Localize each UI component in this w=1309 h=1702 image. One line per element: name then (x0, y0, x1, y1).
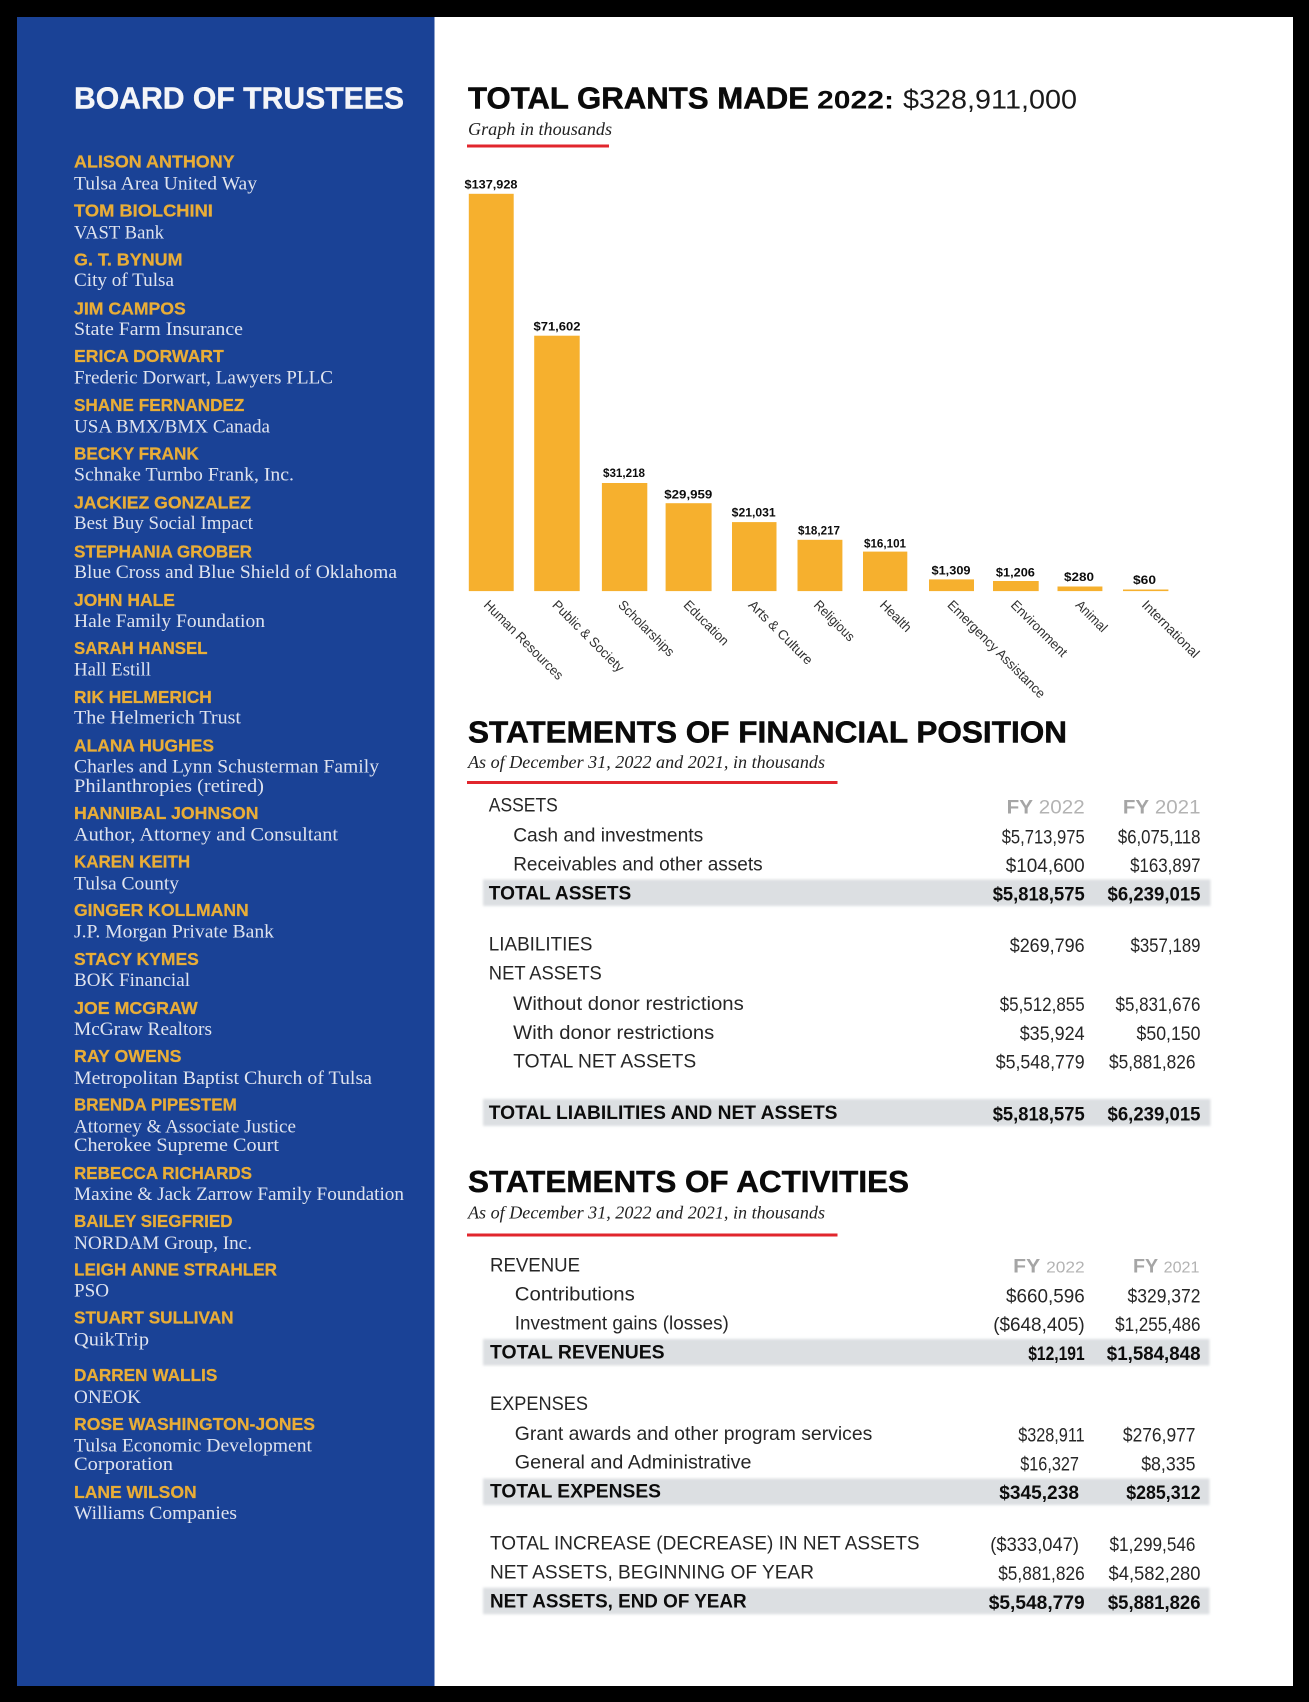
row: net assets header: NET ASSETS (489, 962, 602, 984)
trustee: Joe McGraw: JOE MCGRAW (74, 998, 198, 1018)
table: financial position (483, 795, 1210, 1126)
row: liabilities: $269,796 (1010, 935, 1085, 957)
trustee: G. T. Bynum: City of Tulsa (74, 270, 175, 291)
trustee: G. T. Bynum: G. T. BYNUM (74, 249, 182, 269)
trustee: Joe McGraw: McGraw Realtors (74, 1019, 212, 1040)
white page background (434, 17, 1293, 1686)
trustee: John Hale: Hale Family Foundation (74, 611, 266, 632)
trustee: Darren Wallis: ONEOK (74, 1387, 141, 1408)
row: with donor restrictions: With donor restrictions (513, 1022, 714, 1044)
bar value labels: $280 (1064, 570, 1094, 584)
row: net assets end: $5,548,779 (989, 1592, 1085, 1614)
row: grant awards: $276,977 (1123, 1424, 1196, 1446)
trustee: Karen Keith (74, 851, 190, 894)
trustee: John Hale: JOHN HALE (74, 590, 175, 610)
category axis labels (481, 597, 1203, 701)
row: total assets: TOTAL ASSETS (489, 882, 631, 904)
row: contributions: Contributions (515, 1284, 635, 1306)
row: assets header: FY 2021 (1123, 796, 1200, 818)
row: with donor restrictions (513, 1022, 1201, 1045)
bar value labels: $1,206 (996, 565, 1035, 579)
trustee: Hannibal Johnson (74, 803, 339, 846)
category axis labels: Scholarships (615, 597, 678, 660)
row: without donor restrictions: $5,512,855 (1000, 994, 1085, 1016)
row: contributions: $660,596 (1006, 1285, 1085, 1307)
bar value labels: $137,928 (464, 177, 518, 191)
bar value labels: $16,101 (864, 536, 906, 550)
trustee: Leigh Anne Strahler: LEIGH ANNE STRAHLER (74, 1259, 277, 1279)
row: total assets: $5,818,575 (993, 884, 1085, 906)
trustee: Alana Hughes: Charles and Lynn Schusterman Family (74, 756, 380, 777)
trustee: Karen Keith: KAREN KEITH (74, 851, 190, 871)
row: total liabilities and net assets: TOTAL LIABILITIES AND NET ASSETS (489, 1102, 838, 1124)
row: net assets beginning: NET ASSETS, BEGINNING OF YEAR (490, 1562, 814, 1584)
category axis labels: Human Resources (481, 597, 567, 683)
row: investment gains: $1,255,486 (1115, 1314, 1200, 1336)
row: grant awards: Grant awards and other program services (515, 1423, 873, 1445)
row: liabilities: LIABILITIES (489, 934, 592, 956)
trustee: Leigh Anne Strahler (74, 1259, 277, 1302)
trustee: Stuart Sullivan: STUART SULLIVAN (74, 1308, 234, 1328)
heading: total grants made: 2022: (817, 86, 894, 114)
row: general and administrative: General and Administrative (515, 1452, 752, 1474)
category axis labels: Environment (1008, 597, 1071, 660)
bar value labels: $60 (1133, 573, 1156, 587)
trustee: Stephania Grober: Blue Cross and Blue Shield of Oklahoma (74, 562, 398, 583)
row: total assets: $6,239,015 (1108, 884, 1201, 906)
row: total expenses (490, 1480, 1201, 1504)
subheading: financial position date note: As of December 31, 2022 and 2021, in thousands (467, 752, 825, 772)
trustee: Shane Fernandez (74, 395, 271, 438)
subheading: activities date note: As of December 31, 2022 and 2021, in thousands (467, 1203, 825, 1223)
trustee: Sarah Hansel (74, 638, 208, 681)
table: activities (483, 1254, 1210, 1614)
row: assets header: FY 2022 (1007, 796, 1085, 818)
row: net assets end: $5,881,826 (1108, 1592, 1201, 1614)
trustee: Stacy Kymes: STACY KYMES (74, 949, 199, 969)
trustee: Tom Biolchini: TOM BIOLCHINI (74, 201, 213, 221)
trustee: Lane Wilson: LANE WILSON (74, 1482, 197, 1502)
row: liabilities: $357,189 (1130, 935, 1200, 957)
bar value labels: $29,959 (664, 488, 713, 502)
trustee: Darren Wallis: DARREN WALLIS (74, 1365, 217, 1385)
trustee: Rebecca Richards: REBECCA RICHARDS (74, 1163, 252, 1183)
trustee: Alison Anthony (74, 152, 258, 194)
trustee: Rose Washington-Jones (74, 1414, 315, 1475)
row: without donor restrictions (513, 993, 1200, 1016)
row: investment gains: Investment gains (losses) (515, 1313, 729, 1335)
trustee: Ray Owens: Metropolitan Baptist Church of Tulsa (74, 1068, 373, 1089)
panel: board of trustees (17, 17, 434, 1686)
row: total liabilities and net assets: $5,818,575 (993, 1104, 1085, 1126)
trustee: Brenda Pipestem: Cherokee Supreme Court (74, 1135, 280, 1156)
row: total assets (489, 882, 1201, 906)
trustee: Alana Hughes: ALANA HUGHES (74, 736, 214, 756)
row: total revenues (490, 1342, 1201, 1365)
trustee: Rik Helmerich: RIK HELMERICH (74, 687, 212, 707)
trustee: Brenda Pipestem: Attorney & Associate Justice (74, 1117, 296, 1138)
row: revenue header: FY 2021 (1133, 1256, 1200, 1278)
row: total expenses: TOTAL EXPENSES (490, 1480, 661, 1502)
trustee: Rebecca Richards (74, 1163, 405, 1205)
category axis labels: Animal (1073, 597, 1110, 635)
category axis labels: International (1139, 597, 1203, 661)
trustee: Rose Washington-Jones: Tulsa Economic Development (74, 1436, 313, 1457)
trustee: Jim Campos (74, 298, 243, 340)
trustee: Brenda Pipestem: BRENDA PIPESTEM (74, 1094, 237, 1114)
trustee: Becky Frank: Schnake Turnbo Frank, Inc. (74, 464, 294, 485)
trustee: Ray Owens: RAY OWENS (74, 1046, 182, 1066)
bar value labels: $1,309 (932, 563, 971, 577)
row: net assets beginning: $4,582,280 (1108, 1563, 1201, 1585)
trustee: Stuart Sullivan: QuikTrip (74, 1329, 149, 1350)
category axis labels: Arts & Culture (745, 597, 816, 668)
trustee: Lane Wilson: Williams Companies (74, 1503, 237, 1524)
trustee: Bailey Siegfried: BAILEY SIEGFRIED (74, 1211, 232, 1231)
row: with donor restrictions: $50,150 (1136, 1023, 1201, 1045)
trustee: Rik Helmerich: The Helmerich Trust (74, 707, 242, 728)
trustee: Rose Washington-Jones: Corporation (74, 1454, 174, 1475)
heading: total grants made (468, 80, 1077, 115)
category axis labels: Religious (811, 597, 858, 644)
trustee: Ginger Kollmann: J.P. Morgan Private Bank (74, 921, 275, 942)
trustee: Tom Biolchini: VAST Bank (74, 222, 164, 243)
row: without donor restrictions: Without donor restrictions (513, 993, 744, 1015)
bar chart: grants by category (464, 177, 1203, 701)
trustee: John Hale (74, 590, 266, 632)
heading: statements of activities: STATEMENTS OF ACTIVITIES (468, 1164, 909, 1199)
trustee: Jim Campos: JIM CAMPOS (74, 298, 186, 318)
row: revenue header (490, 1254, 1200, 1278)
row: revenue header: FY 2022 (1013, 1256, 1085, 1278)
trustee: Becky Frank (74, 444, 294, 485)
row: total liabilities and net assets: $6,239,015 (1108, 1104, 1201, 1126)
heading: statements of financial position: STATEMENTS OF FINANCIAL POSITION (468, 715, 1067, 750)
row: total net assets: TOTAL NET ASSETS (513, 1050, 696, 1072)
trustee: Stephania Grober (74, 541, 398, 583)
trustee: Alana Hughes (74, 736, 380, 797)
row: cash and investments: $5,713,975 (1002, 826, 1085, 848)
row: receivables: Receivables and other assets (513, 854, 763, 876)
trustee: Stuart Sullivan (74, 1308, 234, 1350)
trustee: Jim Campos: State Farm Insurance (74, 319, 243, 340)
row: revenue header: REVENUE (490, 1254, 580, 1276)
heading: board of trustees: BOARD OF TRUSTEES (74, 80, 404, 115)
trustee: Stacy Kymes: BOK Financial (74, 970, 190, 991)
row: assets header (489, 795, 1200, 818)
row: grant awards: $328,911 (1018, 1424, 1085, 1446)
trustee: Karen Keith: Tulsa County (74, 874, 180, 894)
row: net assets end: NET ASSETS, END OF YEAR (490, 1591, 747, 1613)
trustee: Ginger Kollmann: GINGER KOLLMANN (74, 900, 249, 920)
subheading: financial position date note (467, 752, 838, 784)
row: expenses header: EXPENSES (490, 1393, 588, 1415)
bar value labels: $21,031 (732, 506, 776, 520)
row: cash and investments: Cash and investments (513, 825, 703, 847)
row: without donor restrictions: $5,831,676 (1116, 994, 1200, 1016)
bars (469, 194, 1168, 591)
trustee: Darren Wallis (74, 1365, 217, 1408)
trustee: Hannibal Johnson: HANNIBAL JOHNSON (74, 803, 258, 823)
trustee: Joe McGraw (74, 998, 212, 1040)
heading: total grants made: TOTAL GRANTS MADE (468, 80, 809, 115)
row: general and administrative: $8,335 (1141, 1453, 1196, 1475)
trustee: Tom Biolchini (74, 201, 213, 243)
trustee: Stacy Kymes (74, 949, 199, 991)
trustee: Jackiez Gonzalez: Best Buy Social Impact (74, 513, 254, 534)
row: investment gains (515, 1313, 1200, 1336)
row: receivables: $104,600 (1006, 855, 1085, 877)
category axis labels: Health (877, 597, 915, 635)
subheading: graph in thousands (467, 119, 612, 148)
row: total increase: $1,299,546 (1110, 1534, 1196, 1556)
row: contributions: $329,372 (1128, 1285, 1200, 1307)
row: receivables (513, 854, 1200, 877)
row: total net assets: $5,548,779 (996, 1051, 1085, 1073)
row: cash and investments: $6,075,118 (1118, 826, 1200, 848)
row: cash and investments (513, 825, 1200, 848)
row: assets header: ASSETS (489, 795, 558, 817)
category axis labels: Public & Society (549, 597, 627, 675)
row: total net assets (513, 1050, 1196, 1073)
row: total net assets: $5,881,826 (1109, 1051, 1196, 1073)
row: liabilities (489, 934, 1200, 957)
trustee: Leigh Anne Strahler: PSO (74, 1280, 109, 1302)
trustee: Sarah Hansel: Hall Estill (74, 660, 151, 681)
row: general and administrative: $16,327 (1020, 1453, 1079, 1475)
subheading: activities date note (467, 1203, 838, 1236)
row: receivables: $163,897 (1130, 855, 1200, 877)
trustee: Alison Anthony: ALISON ANTHONY (74, 152, 235, 172)
row: total revenues: TOTAL REVENUES (490, 1342, 665, 1364)
trustee: Stephania Grober: STEPHANIA GROBER (74, 541, 252, 561)
trustee: Rik Helmerich (74, 687, 242, 728)
trustee: Rebecca Richards: Maxine & Jack Zarrow Family Foundation (74, 1184, 405, 1205)
row: total expenses: $345,238 (999, 1482, 1079, 1504)
row: general and administrative (515, 1452, 1196, 1475)
row: investment gains: ($648,405) (993, 1314, 1085, 1336)
row: total increase: TOTAL INCREASE (DECREASE) IN NET ASSETS (490, 1533, 920, 1555)
trustee: Erica Dorwart: Frederic Dorwart, Lawyers PLLC (74, 368, 333, 389)
trustee: Ray Owens (74, 1046, 373, 1089)
category axis labels: Education (681, 597, 732, 648)
subheading: graph in thousands: Graph in thousands (468, 119, 612, 139)
trustee: Sarah Hansel: SARAH HANSEL (74, 638, 208, 658)
trustee: Becky Frank: BECKY FRANK (74, 444, 199, 464)
heading: total grants made: $328,911,000 (903, 84, 1077, 114)
trustee: Alison Anthony: Tulsa Area United Way (74, 173, 258, 194)
row: total expenses: $285,312 (1126, 1482, 1201, 1504)
trustee: Shane Fernandez: SHANE FERNANDEZ (74, 395, 245, 415)
bar value labels: $18,217 (798, 524, 840, 538)
trustee: Erica Dorwart: ERICA DORWART (74, 346, 224, 366)
trustee: Lane Wilson (74, 1482, 237, 1524)
trustee: Rose Washington-Jones: ROSE WASHINGTON-JONES (74, 1414, 315, 1434)
trustee: G. T. Bynum (74, 249, 182, 291)
trustee: Jackiez Gonzalez: JACKIEZ GONZALEZ (74, 492, 251, 512)
bar value labels: $71,602 (534, 320, 581, 334)
row: with donor restrictions: $35,924 (1020, 1023, 1085, 1045)
row: grant awards (515, 1423, 1196, 1446)
row: total increase (490, 1533, 1196, 1556)
trustee: Hannibal Johnson: Author, Attorney and Consultant (74, 825, 339, 846)
trustee: Brenda Pipestem (74, 1094, 296, 1156)
category axis labels: Emergency Assistance (944, 597, 1048, 701)
trustee: Bailey Siegfried (74, 1211, 252, 1254)
trustee: Shane Fernandez: USA BMX/BMX Canada (74, 417, 271, 438)
row: total liabilities and net assets (489, 1102, 1201, 1126)
row: net assets beginning: $5,881,826 (998, 1563, 1085, 1585)
row: net assets end (490, 1591, 1201, 1614)
trustee: Erica Dorwart (74, 346, 333, 389)
row: total revenues: $12,191 (1028, 1343, 1085, 1365)
row: contributions (515, 1284, 1200, 1307)
row: total revenues: $1,584,848 (1107, 1343, 1201, 1365)
trustee: Jackiez Gonzalez (74, 492, 254, 534)
bar value labels: $31,218 (603, 466, 645, 480)
bar value labels (464, 177, 1156, 587)
trustee: Ginger Kollmann (74, 900, 275, 942)
row: net assets beginning (490, 1562, 1201, 1585)
trustee: Alana Hughes: Philanthropies (retired) (74, 776, 264, 797)
trustee: Bailey Siegfried: NORDAM Group, Inc. (74, 1233, 252, 1254)
row: total increase: ($333,047) (990, 1534, 1079, 1556)
